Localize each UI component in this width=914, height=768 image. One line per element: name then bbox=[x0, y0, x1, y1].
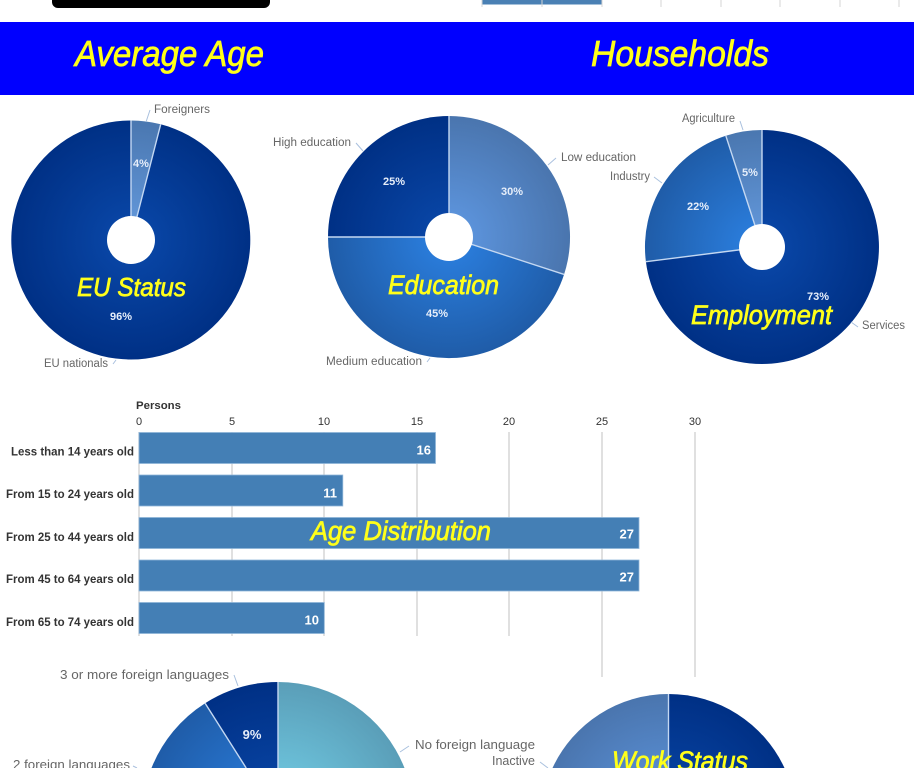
category labels: From 65 to 74 years old bbox=[6, 615, 134, 629]
title: Employment: Employment bbox=[691, 300, 833, 330]
bar values bbox=[305, 442, 634, 628]
x axis numbers: 15 bbox=[411, 416, 423, 428]
x axis numbers: 5 bbox=[229, 416, 235, 428]
pie chart: Education: 25% bbox=[383, 176, 405, 188]
x axis numbers: 20 bbox=[503, 416, 515, 428]
category labels: Less than 14 years old bbox=[11, 444, 134, 458]
pie chart: Education: 30% bbox=[501, 186, 523, 198]
bar values: 16 bbox=[417, 442, 431, 458]
pie chart: Employment: Agriculture bbox=[682, 113, 735, 125]
pie chart: Education: Medium education bbox=[326, 356, 422, 368]
title: Age Distribution: Age Distribution bbox=[309, 516, 491, 546]
category labels bbox=[6, 444, 134, 629]
bar values: 11 bbox=[323, 486, 337, 500]
pie chart: Employment: 22% bbox=[687, 201, 709, 213]
bar values: 10 bbox=[305, 612, 319, 628]
black rounded box remnant bbox=[52, 0, 270, 8]
title: Education: Education bbox=[388, 270, 499, 300]
pie chart: Employment: Services bbox=[862, 320, 905, 332]
x axis numbers: 25 bbox=[596, 416, 608, 428]
bar values: 27 bbox=[620, 526, 634, 542]
x axis numbers: 0 bbox=[136, 416, 142, 428]
bars bbox=[139, 432, 639, 634]
pie chart: Employment bbox=[610, 113, 905, 364]
cropped bar chart remnant at top bbox=[482, 0, 899, 7]
x axis numbers bbox=[136, 416, 701, 428]
category labels: From 45 to 64 years old bbox=[6, 572, 134, 586]
bar values: 27 bbox=[620, 570, 634, 584]
x axis numbers: 30 bbox=[689, 416, 701, 428]
category labels: From 15 to 24 years old bbox=[6, 487, 134, 501]
pie chart: Employment: 73% bbox=[807, 291, 829, 303]
pie chart: Work Status bbox=[492, 694, 784, 768]
pie chart: Languages bbox=[13, 667, 535, 768]
pie chart: EU Status: EU nationals bbox=[44, 358, 108, 370]
axis title: Persons bbox=[136, 400, 181, 412]
pie chart: EU Status bbox=[11, 104, 250, 370]
pie chart: Employment: 5% bbox=[742, 167, 758, 179]
pie chart: Education: High education bbox=[273, 137, 351, 149]
heading: Households: Households bbox=[591, 33, 769, 74]
pie chart: Education: 45% bbox=[426, 308, 448, 320]
pie chart: Languages: 9% bbox=[243, 727, 262, 742]
pie chart: Languages: 3 or more foreign languages bbox=[60, 667, 230, 682]
pie chart: EU Status: 4% bbox=[133, 158, 149, 170]
pie chart: Work Status: Inactive bbox=[492, 753, 535, 768]
title: EU Status: EU Status bbox=[77, 272, 186, 302]
heading: Average Age: Average Age bbox=[73, 33, 264, 74]
header band bbox=[0, 22, 914, 95]
pie chart: Languages: No foreign language bbox=[415, 737, 535, 752]
bar chart: Age Distribution bbox=[6, 400, 701, 677]
category labels: From 25 to 44 years old bbox=[6, 530, 134, 544]
pie chart: EU Status: Foreigners bbox=[154, 104, 210, 116]
pie chart: EU Status: 96% bbox=[110, 311, 132, 323]
pie chart: Education: Low education bbox=[561, 152, 636, 164]
pie chart: Employment: Industry bbox=[610, 171, 650, 183]
pie chart: Education bbox=[273, 116, 636, 368]
x axis numbers: 10 bbox=[318, 416, 330, 428]
